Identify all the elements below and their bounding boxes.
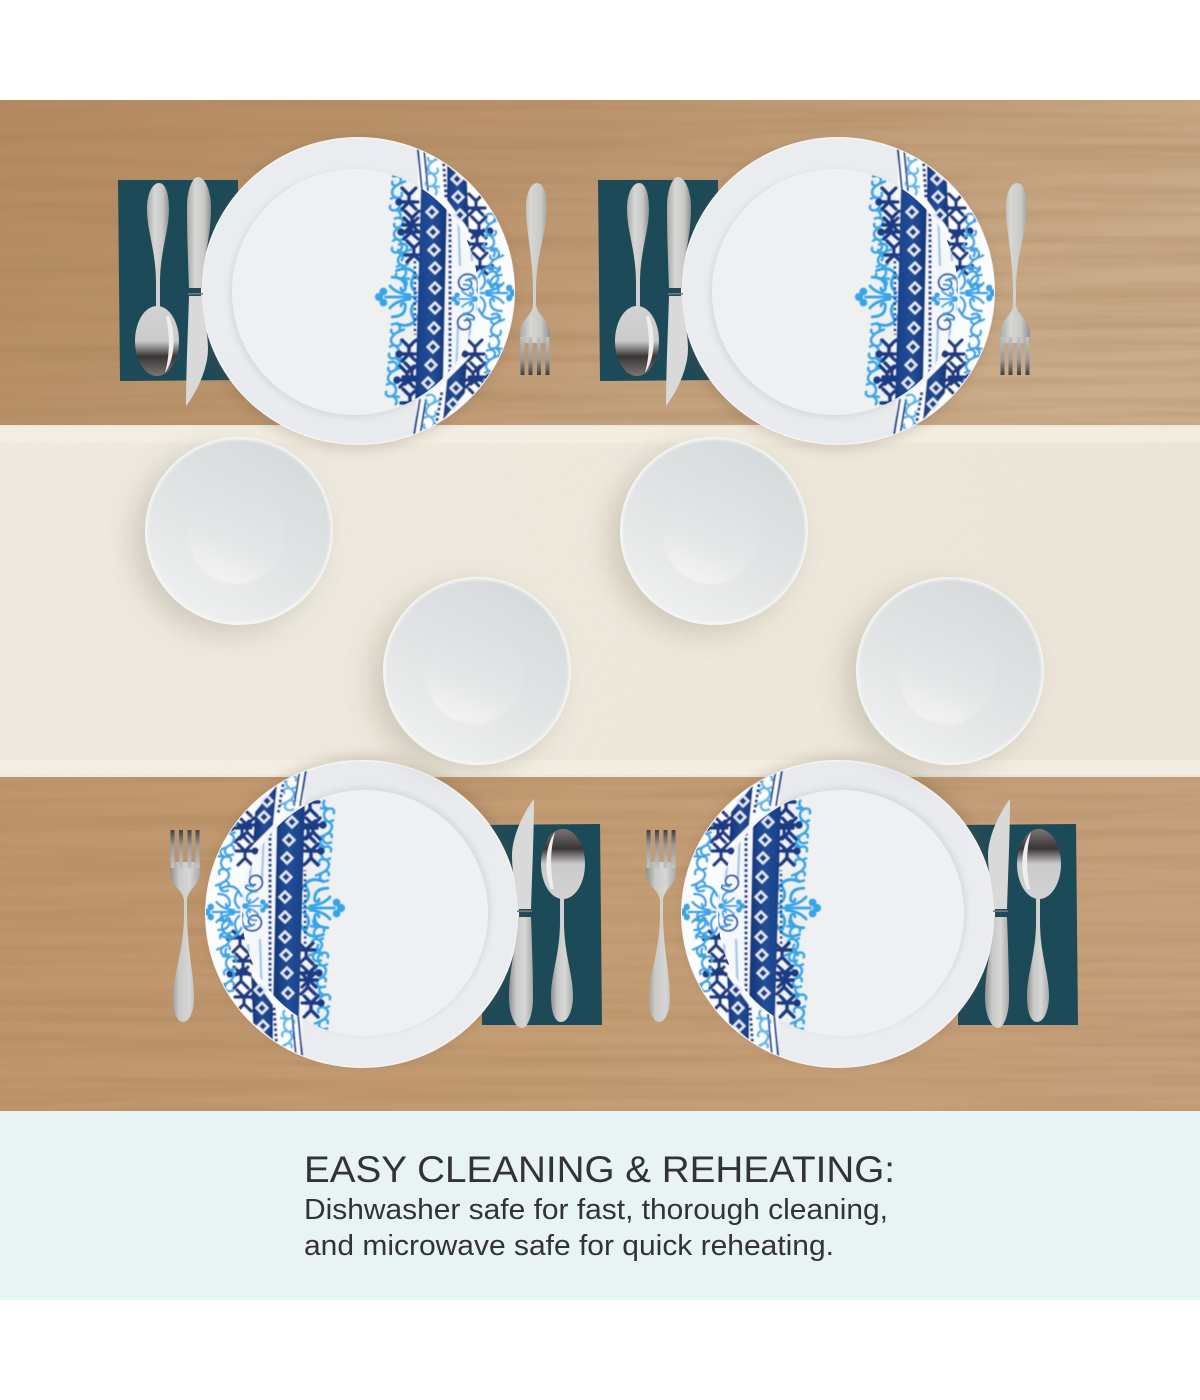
linen table runner xyxy=(0,425,1200,777)
spoon xyxy=(1017,829,1061,1022)
bowl: lower left xyxy=(371,577,571,774)
spoon xyxy=(615,183,659,376)
place setting: bottom right xyxy=(646,754,1078,1074)
dinner plate blue pattern xyxy=(894,131,998,451)
place setting: top right xyxy=(598,131,1030,451)
salad plate xyxy=(709,169,958,418)
table top wood surface xyxy=(0,100,1200,426)
spoon xyxy=(541,829,585,1022)
knife xyxy=(509,799,534,1028)
bowl: upper right xyxy=(608,437,808,634)
dinner plate xyxy=(197,137,515,450)
salad plate blue pattern xyxy=(237,784,344,1044)
body text: Dishwasher safe for fast, thorough cleaning, xyxy=(304,1194,888,1226)
fork xyxy=(1000,183,1030,375)
dinner plate xyxy=(205,755,523,1068)
dinner plate blue pattern xyxy=(414,131,518,451)
napkin xyxy=(482,824,602,1025)
body text: and microwave safe for quick reheating. xyxy=(304,1230,834,1262)
knife xyxy=(985,799,1010,1028)
dinner plate xyxy=(681,755,999,1068)
salad plate blue pattern xyxy=(856,161,963,421)
fork xyxy=(646,830,676,1022)
salad plate xyxy=(229,169,478,418)
heading: EASY CLEANING & REHEATING: xyxy=(304,1149,895,1190)
spoon xyxy=(135,183,179,376)
napkin xyxy=(958,824,1078,1025)
body text xyxy=(304,1194,888,1262)
table bottom wood surface xyxy=(0,775,1200,1111)
knife xyxy=(186,177,211,406)
bowl: lower right xyxy=(844,577,1044,774)
napkin xyxy=(598,180,718,381)
place setting: top left xyxy=(118,131,550,451)
salad plate xyxy=(242,787,491,1036)
caption panel xyxy=(0,1111,1200,1300)
fork xyxy=(170,830,200,1022)
salad plate xyxy=(718,787,967,1036)
fork xyxy=(520,183,550,375)
napkin xyxy=(118,180,238,381)
place setting: bottom left xyxy=(170,754,602,1074)
salad plate blue pattern xyxy=(713,784,820,1044)
dinner plate blue pattern xyxy=(202,754,306,1074)
dinner plate blue pattern xyxy=(678,754,782,1074)
bowl: upper left xyxy=(133,437,333,634)
salad plate blue pattern xyxy=(376,161,483,421)
knife xyxy=(666,177,691,406)
dinner plate xyxy=(677,137,995,450)
